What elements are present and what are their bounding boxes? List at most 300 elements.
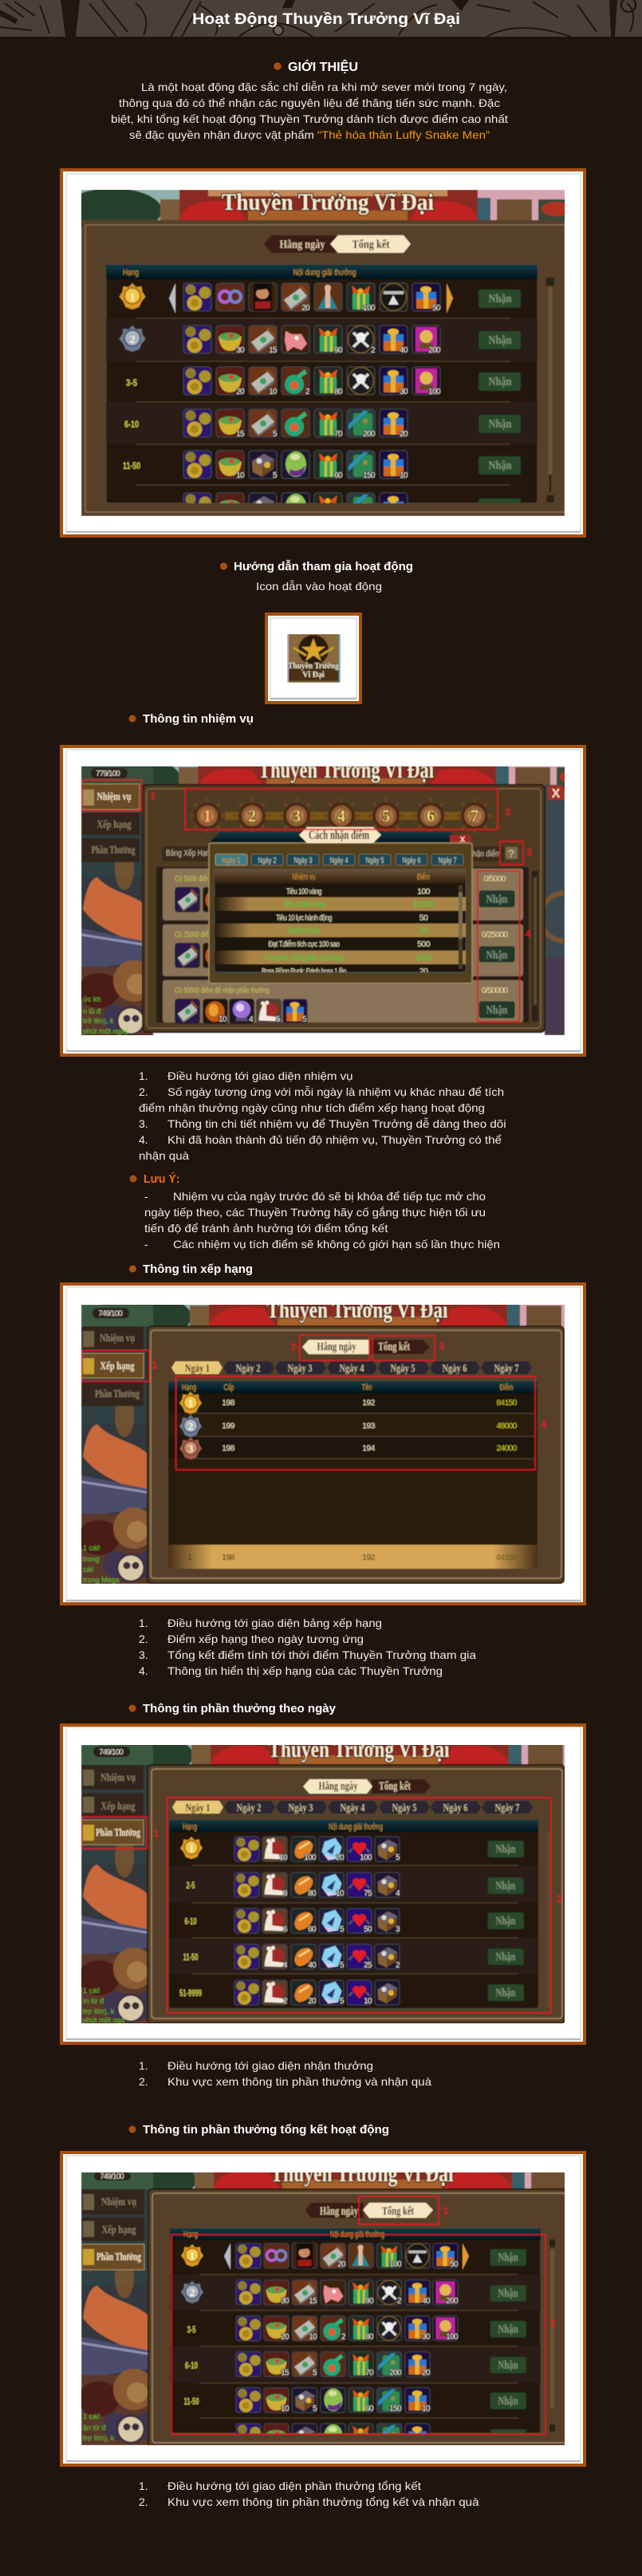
panel: screenshot summary rewards: 15 — [236, 430, 245, 439]
panel: screenshot summary rewards: 90 — [334, 346, 343, 355]
panel: screenshot daily rewards: Ngày 4 — [340, 1802, 365, 1814]
panel: screenshot mission: phút một ngày — [83, 1027, 129, 1035]
panel: screenshot ranking: 192 — [362, 1553, 376, 1562]
list: notes: ngày tiếp theo, các Thuyền Trưởng hãy cố gắng thực hiện tối ưu — [144, 1206, 486, 1219]
list: daily reward notes: Khu vực xem thông tin phần thưởng và nhận quà — [167, 2075, 431, 2088]
panel: screenshot daily rewards: 6-10 — [185, 1916, 197, 1927]
intro paragraph: “Thẻ hóa thân Luffy Snake Men” — [317, 128, 490, 141]
panel: screenshot daily rewards: 75 — [364, 1889, 372, 1898]
panel: screenshot mission: Thuyền Trưởng Vĩ Đại — [258, 757, 434, 783]
panel: screenshot daily rewards: Phần Thưởng — [96, 1827, 140, 1839]
panel: screenshot ranking: 1 — [152, 1360, 158, 1371]
panel: screenshot final rewards: 90 — [365, 2297, 374, 2306]
heading: lưu ý — [129, 1172, 180, 1186]
panel: screenshot mission: Có 50000 điểm để nhận phần thưởng — [175, 986, 270, 995]
panel: screenshot final rewards: 10 — [281, 2405, 289, 2413]
panel: screenshot summary rewards: 2 — [371, 346, 376, 355]
panel: screenshot mission: ức kh — [83, 995, 101, 1003]
list: daily reward notes: 2. — [139, 2075, 148, 2088]
panel: screenshot ranking: Điểm — [499, 1383, 514, 1392]
panel: screenshot mission: Tiêu 10000 vàng — [282, 900, 325, 909]
panel: screenshot final rewards: 10 — [309, 2333, 317, 2342]
panel: screenshot mission: Ngày 5 — [365, 857, 384, 865]
panel: screenshot summary rewards: Nhận — [488, 418, 512, 431]
panel: screenshot mission: 3 — [293, 806, 301, 825]
panel: screenshot daily rewards: 5 — [340, 1961, 345, 1970]
panel: screenshot final rewards: 70 — [365, 2369, 374, 2377]
panel: screenshot summary rewards: 3-5 — [126, 377, 137, 388]
panel: screenshot summary rewards: 200 — [428, 346, 441, 355]
list: mission notes: nhận quà — [139, 1149, 189, 1162]
panel: screenshot ranking: 198 — [222, 1553, 235, 1562]
panel: screenshot mission: ? — [508, 847, 514, 860]
panel: screenshot daily rewards: 6 — [283, 1925, 288, 1934]
intro paragraph: sẽ đặc quyền nhận được vật phẩm — [129, 128, 314, 141]
panel: activity icon: Thuyền Trưởng — [288, 662, 339, 671]
panel: screenshot summary rewards: 10 — [269, 388, 278, 396]
list: ranking notes: Điểm xếp hạng theo ngày tương ứng — [167, 1633, 364, 1645]
panel: screenshot daily rewards: 4 — [283, 1961, 288, 1970]
panel: screenshot summary rewards: 200 — [363, 430, 376, 439]
panel: screenshot daily rewards: 1 — [153, 1828, 159, 1839]
panel: screenshot ranking: 192 — [362, 1398, 376, 1408]
panel: screenshot final rewards: Nhận — [498, 2395, 518, 2408]
panel: screenshot ranking: 194 — [362, 1444, 376, 1453]
panel: screenshot daily rewards: 20 — [308, 1997, 317, 2006]
panel: screenshot mission: Ngày 6 — [402, 857, 421, 865]
panel: screenshot ranking: trong Mega — [83, 1576, 120, 1584]
panel: screenshot summary rewards: 10 — [400, 471, 408, 480]
panel: screenshot mission: 779/100 — [96, 770, 120, 778]
panel: screenshot daily rewards: Xếp hạng — [100, 1801, 136, 1813]
panel: screenshot mission: trở lên), k — [83, 1017, 114, 1025]
panel: screenshot daily rewards: Ngày 1 — [185, 1802, 211, 1814]
panel: screenshot summary rewards: 100 — [428, 388, 441, 396]
panel: screenshot daily rewards: Hằng ngày — [319, 1780, 358, 1793]
panel: screenshot mission: Có 5000 điểm — [175, 874, 211, 884]
list: notes: - — [144, 1190, 148, 1203]
panel: screenshot mission: 2 — [248, 806, 256, 825]
panel: screenshot mission: X — [552, 787, 561, 801]
panel: screenshot mission: 10 — [219, 1015, 227, 1024]
panel: screenshot ranking: 193 — [362, 1421, 376, 1431]
panel: screenshot summary rewards: Hằng ngày — [279, 238, 325, 251]
panel: screenshot final rewards: 749/100 — [100, 2172, 124, 2181]
panel: screenshot ranking: Thuyền Trưởng Vĩ Đại — [266, 1297, 448, 1323]
panel: screenshot summary rewards: 100 — [363, 304, 376, 313]
heading: thông tin xếp hạng: Thông tin xếp hạng — [143, 1263, 253, 1276]
panel: screenshot daily rewards: Nhận — [496, 1951, 516, 1964]
panel: screenshot final rewards: 3-5 — [187, 2324, 196, 2335]
panel: screenshot final rewards: Tổng kết — [382, 2205, 414, 2218]
panel: screenshot final rewards: 10 — [422, 2405, 431, 2413]
panel: screenshot daily rewards: 2-5 — [187, 1880, 195, 1891]
panel: screenshot summary rewards: 20 — [236, 388, 245, 396]
panel: screenshot ranking: 1 cái! — [83, 1544, 100, 1552]
panel: screenshot mission: Điểm — [417, 872, 430, 882]
panel: screenshot final rewards: 40 — [422, 2297, 431, 2306]
panel: screenshot mission: Nhận — [486, 949, 508, 962]
list: notes: Các nhiệm vụ tích điểm sẽ không có giới hạn số lần thực hiện — [173, 1238, 500, 1251]
panel: screenshot mission: 20 — [419, 926, 428, 935]
heading: thông tin phần thưởng tổng kết: Thông tin phần thưởng tổng kết hoạt động — [143, 2124, 389, 2137]
panel: screenshot daily rewards: 5 — [396, 1853, 400, 1862]
panel: screenshot mission: Phần Thưởng — [91, 845, 136, 857]
panel: screenshot summary rewards: 15 — [269, 346, 278, 355]
list: notes — [144, 1190, 500, 1251]
panel: screenshot summary rewards: 11-50 — [123, 460, 140, 471]
list: daily reward notes: Điều hướng tới giao diện nhận thưởng — [167, 2059, 373, 2072]
panel: screenshot daily rewards: 51-9999 — [179, 1987, 202, 1999]
panel: screenshot ranking: Ngày 2 — [236, 1362, 261, 1374]
list: mission notes: điểm nhận thưởng ngày cũng như tích điểm xếp hạng hoạt động — [139, 1101, 485, 1114]
panel: screenshot mission: X — [460, 836, 466, 845]
panel: screenshot summary rewards: Tổng kết — [353, 238, 390, 251]
panel: screenshot final rewards: Thuyền Trưởng Vĩ Đại — [271, 2160, 453, 2187]
panel: screenshot ranking: 2 — [291, 1341, 297, 1353]
panel: screenshot summary rewards: 5 — [273, 430, 278, 439]
panel: screenshot ranking: 199 — [222, 1421, 235, 1431]
panel: screenshot ranking: 84150 — [496, 1553, 518, 1562]
panel: screenshot mission: 100 — [417, 887, 431, 896]
panel: screenshot daily rewards: ìn từ đ — [83, 1997, 104, 2005]
panel: screenshot ranking: Cấp — [223, 1383, 234, 1392]
heading: hướng dẫn tham gia: Hướng dẫn tham gia hoạt động — [234, 560, 413, 573]
list: notes: tiến độ để tránh ảnh hưởng tới điểm tổng kết — [144, 1222, 388, 1235]
intro paragraph — [111, 81, 508, 141]
panel: screenshot summary rewards: 2 — [305, 388, 310, 396]
list: mission notes: Khi đã hoàn thành đủ tiến độ nhiệm vụ, Thuyền Trưởng có thể — [167, 1133, 502, 1146]
heading: lưu ý: Lưu Ý: — [144, 1172, 180, 1186]
panel: screenshot ranking: Ngày 1 — [185, 1362, 210, 1374]
panel: screenshot mission: Ngày 7 — [439, 857, 457, 865]
panel: screenshot ranking: 3 — [188, 1444, 193, 1455]
panel: screenshot daily rewards: 80 — [308, 1889, 317, 1898]
panel: screenshot final rewards: ận từ đ — [83, 2424, 106, 2432]
panel: screenshot ranking: Nhiệm vụ — [100, 1333, 135, 1345]
panel: screenshot final rewards: trợ lớn), k — [83, 2434, 115, 2442]
list: ranking notes: 1. — [139, 1617, 148, 1629]
panel: screenshot mission: 12000 — [413, 900, 435, 909]
panel: screenshot mission: 1 — [203, 806, 211, 825]
panel: screenshot daily rewards: Nội dung giải thưởng — [329, 1822, 383, 1832]
panel: screenshot summary rewards: 6-10 — [124, 419, 139, 430]
heading: giới thiệu: GIỚI THIỆU — [288, 59, 358, 74]
panel: screenshot mission: 1000 — [416, 953, 432, 963]
panel: screenshot daily rewards: 749/100 — [99, 1748, 124, 1757]
panel: screenshot daily rewards: Hạng — [183, 1822, 197, 1832]
panel: screenshot mission: Ngày 2 — [258, 857, 277, 865]
panel: screenshot daily rewards: 2 — [557, 1893, 562, 1904]
panel: screenshot summary rewards — [60, 168, 586, 538]
panel: screenshot summary rewards: Nhận — [488, 334, 512, 347]
list: mission notes: 4. — [139, 1133, 148, 1146]
panel: screenshot summary rewards: 2 — [129, 334, 136, 346]
panel: screenshot daily rewards: 50 — [364, 1925, 372, 1934]
panel: screenshot daily rewards: 60 — [308, 1925, 317, 1934]
panel: screenshot mission: Nhận — [486, 1004, 508, 1017]
panel: screenshot final rewards: 30 — [281, 2297, 289, 2306]
list: final reward notes: 2. — [139, 2495, 148, 2508]
panel: screenshot daily rewards: 2 — [396, 1961, 400, 1970]
panel: screenshot final rewards: 100 — [446, 2333, 459, 2342]
panel: screenshot summary rewards: 30 — [236, 346, 245, 355]
panel: screenshot daily rewards: 1 — [188, 1843, 195, 1855]
panel: screenshot mission: Nhiệm vụ — [292, 872, 316, 882]
panel: screenshot ranking: cái! — [83, 1566, 94, 1574]
panel: screenshot summary rewards: 30 — [400, 388, 408, 396]
panel: screenshot mission: Tiêu 100 vàng — [286, 887, 322, 896]
panel: activity icon: Vĩ Đại — [302, 671, 325, 679]
panel: screenshot final rewards: Nhận — [498, 2287, 518, 2300]
list: final reward notes: 1. — [139, 2479, 148, 2492]
panel: screenshot daily rewards: 5 — [340, 1997, 345, 2006]
panel: screenshot mission: 0/50000 — [482, 986, 508, 995]
panel: screenshot final rewards: 15 — [281, 2369, 289, 2377]
list: daily reward notes: 1. — [139, 2059, 148, 2072]
panel: screenshot ranking: 24000 — [496, 1444, 518, 1453]
panel: screenshot daily rewards: 10 — [364, 1997, 372, 2006]
panel: screenshot mission: 5 — [382, 806, 390, 825]
panel: activity icon — [266, 614, 360, 703]
panel: screenshot mission: Ra khơi 1 lần — [288, 926, 321, 935]
panel: screenshot daily rewards: 5 — [340, 1925, 345, 1934]
panel: screenshot ranking: 2 — [188, 1421, 193, 1433]
panel: screenshot summary rewards: 150 — [363, 471, 376, 480]
panel: screenshot ranking: Phần Thưởng — [95, 1388, 140, 1400]
panel: screenshot daily rewards: Nhận — [496, 1843, 516, 1856]
panel: screenshot final rewards: 1 — [443, 2205, 449, 2216]
panel: screenshot final rewards: Hạng — [183, 2230, 198, 2239]
panel: screenshot mission: Ngày 3 — [293, 857, 313, 865]
panel: screenshot ranking: 198 — [222, 1398, 235, 1408]
panel: screenshot daily rewards: phút một ngà — [83, 2016, 125, 2024]
panel: screenshot daily rewards: 10 — [336, 1889, 345, 1898]
panel: screenshot mission: Nhận — [486, 893, 508, 906]
panel: screenshot mission: 7 — [471, 806, 479, 825]
intro paragraph: Là một hoạt động đặc sắc chỉ diễn ra khi mở sever mới trong 7 ngày, — [141, 81, 507, 93]
list: notes: Nhiệm vụ của ngày trước đó sẽ bị khóa để tiếp tục mở cho — [173, 1190, 486, 1203]
panel: screenshot ranking: 198 — [222, 1444, 235, 1453]
panel: screenshot final rewards: 2 — [341, 2333, 346, 2342]
panel: screenshot summary rewards: Hạng — [123, 268, 139, 278]
panel: screenshot mission: 50 — [419, 913, 428, 923]
panel: screenshot ranking: 1 — [188, 1398, 193, 1410]
list: ranking notes: 4. — [139, 1664, 148, 1677]
panel: screenshot final rewards: 2 — [397, 2297, 402, 2306]
list: final reward notes — [139, 2479, 479, 2508]
panel: screenshot ranking: Hằng ngày — [317, 1341, 356, 1353]
panel: screenshot final rewards: 80 — [365, 2333, 374, 2342]
panel: screenshot mission: 0/5000 — [483, 874, 506, 884]
panel: screenshot ranking: 3 — [439, 1341, 445, 1352]
panel: screenshot mission: 2 — [506, 806, 511, 817]
panel: screenshot final rewards: 20 — [337, 2260, 346, 2269]
panel: screenshot ranking: Ngày 4 — [340, 1362, 364, 1374]
panel: screenshot final rewards: Nội dung giải thưởng — [330, 2230, 384, 2239]
intro paragraph: thông qua đó có thể nhận các nguyên liệu để thăng tiến sức mạnh. Đặc — [119, 97, 500, 109]
panel: screenshot final rewards: 150 — [389, 2405, 402, 2413]
panel: screenshot summary rewards: 60 — [334, 471, 343, 480]
panel: screenshot mission: 3 — [527, 847, 533, 858]
panel: screenshot ranking: Xếp hạng — [100, 1361, 134, 1373]
panel: screenshot summary rewards: Nội dung giải thưởng — [293, 268, 356, 278]
panel: screenshot summary rewards: 20 — [400, 430, 408, 439]
panel: screenshot final rewards: Nhận — [498, 2251, 518, 2264]
panel: screenshot ranking: Tên — [362, 1383, 372, 1392]
list: ranking notes: Thông tin hiển thị xếp hạng của các Thuyền Trưởng — [167, 1664, 443, 1677]
panel: screenshot daily rewards: Nhận — [496, 1987, 516, 1999]
panel: screenshot daily rewards: Nhận — [496, 1915, 516, 1928]
panel: screenshot daily rewards: Ngày 3 — [289, 1802, 313, 1814]
panel: screenshot ranking: Ngày 6 — [442, 1362, 467, 1374]
panel: screenshot ranking: Ngày 5 — [391, 1362, 416, 1374]
list: ranking notes: 2. — [139, 1633, 148, 1645]
panel: screenshot mission: Cách nhận điểm — [309, 829, 369, 842]
panel: screenshot mission: Boss Rồng Punk: Đánh boss 1 lần — [262, 967, 347, 976]
panel: screenshot mission: Nhiệm vụ — [97, 791, 132, 803]
panel: screenshot mission: Ngày 4 — [330, 857, 349, 865]
list: mission notes: Thông tin chi tiết nhiệm vụ để Thuyền Trưởng dễ dàng theo dõi — [167, 1117, 506, 1130]
panel: screenshot final rewards: Xếp hạng — [102, 2224, 136, 2236]
text: icon dẫn vào hoạt động: Icon dẫn vào hoạt động — [256, 580, 382, 593]
list: mission notes: Điều hướng tới giao diện nhiệm vụ — [167, 1069, 353, 1082]
panel: screenshot mission: Có 25000 điểm — [175, 930, 213, 939]
panel: screenshot daily rewards — [60, 1723, 586, 2045]
panel: screenshot summary rewards: 20 — [301, 304, 310, 313]
panel: screenshot summary rewards: 50 — [432, 304, 441, 313]
panel: screenshot ranking: 4 — [542, 1419, 547, 1430]
panel: screenshot daily rewards: 4 — [396, 1889, 400, 1898]
panel: screenshot mission: 20 — [419, 967, 428, 976]
panel: screenshot summary rewards: Nhận — [488, 293, 512, 305]
panel: screenshot daily rewards: 10 — [279, 1853, 288, 1862]
panel: screenshot summary rewards: Nhận — [488, 376, 512, 388]
panel: screenshot summary rewards: 70 — [334, 430, 343, 439]
panel: screenshot daily rewards: 20 — [336, 1853, 345, 1862]
panel: screenshot mission: Tiêu 10 lực hành động — [276, 913, 333, 923]
list: mission notes: 2. — [139, 1085, 148, 1098]
list: daily reward notes — [139, 2059, 431, 2088]
panel: screenshot summary rewards: 1 — [129, 292, 136, 304]
panel: screenshot daily rewards: trợ lớn), k — [83, 2007, 115, 2015]
panel: screenshot final rewards: 5 — [313, 2405, 317, 2413]
panel: screenshot final rewards: 5 — [313, 2369, 317, 2377]
intro paragraph: biệt, khi tổng kết hoạt động Thuyền Trưởng dành tích được điểm cao nhất — [111, 112, 508, 125]
panel: screenshot final rewards: 100 — [389, 2260, 402, 2269]
panel: screenshot mission: 4 — [337, 806, 346, 825]
panel: screenshot final rewards: 60 — [365, 2405, 374, 2413]
panel: screenshot daily rewards: 1 cái! — [83, 1987, 100, 1995]
panel: screenshot final rewards: Nhận — [498, 2359, 518, 2372]
panel: screenshot final rewards: Nhiệm vụ — [101, 2196, 136, 2208]
panel: screenshot summary rewards: 80 — [334, 388, 343, 396]
panel: screenshot mission: nhận điểm — [469, 849, 501, 859]
panel: screenshot mission: 500 — [417, 939, 431, 949]
panel: screenshot summary rewards: 5 — [273, 471, 278, 480]
panel: screenshot mission: Công hội : Cống hiến 120 vàng — [265, 953, 344, 963]
panel: screenshot ranking: trong — [83, 1555, 100, 1563]
panel: screenshot ranking: 1 — [187, 1553, 192, 1562]
panel: screenshot ranking: 749/100 — [98, 1310, 123, 1318]
panel: screenshot mission: Đạt T.điểm tích cực 100 sao — [268, 939, 340, 949]
panel: screenshot daily rewards: Nhiệm vụ — [100, 1772, 136, 1784]
panel: screenshot mission: 5 — [302, 1015, 307, 1024]
list: ranking notes: Điều hướng tới giao diện bảng xếp hạng — [167, 1617, 382, 1629]
panel: screenshot daily rewards: 100 — [304, 1853, 317, 1862]
panel: screenshot summary rewards: Nhận — [488, 459, 512, 472]
list: notes: - — [144, 1238, 148, 1251]
panel: screenshot daily rewards: Thuyền Trưởng Vĩ Đại — [268, 1736, 450, 1763]
list: ranking notes: Tổng kết điểm tính tới thời điểm Thuyền Trưởng tham gia — [167, 1648, 476, 1661]
panel: screenshot final rewards: Hằng ngày — [320, 2205, 358, 2218]
panel: screenshot mission: 4 — [526, 928, 531, 939]
list: final reward notes: Điều hướng tới giao diện phần thưởng tổng kết — [167, 2479, 421, 2492]
panel: screenshot daily rewards: Ngày 5 — [392, 1802, 417, 1814]
panel: screenshot final rewards: 2 — [550, 2318, 556, 2329]
panel: screenshot final rewards: 11-50 — [183, 2396, 199, 2407]
panel: screenshot mission: 5 — [276, 1015, 281, 1024]
panel: screenshot ranking — [60, 1282, 586, 1605]
panel: screenshot mission: n lũ đ — [83, 1007, 100, 1015]
panel: screenshot daily rewards: Ngày 6 — [443, 1802, 468, 1814]
panel: screenshot final rewards: 1 cái! — [83, 2413, 100, 2420]
panel: screenshot daily rewards: 25 — [364, 1961, 372, 1970]
list: ranking notes — [139, 1617, 476, 1677]
panel: screenshot daily rewards: Ngày 2 — [236, 1802, 262, 1814]
panel: screenshot daily rewards: 100 — [360, 1853, 372, 1862]
panel: screenshot final rewards: Nhận — [498, 2323, 518, 2336]
panel: screenshot mission: 6 — [427, 806, 435, 825]
panel: screenshot daily rewards: 40 — [308, 1961, 317, 1970]
panel: screenshot mission: Bảng Xếp Hạng — [166, 849, 214, 858]
panel: screenshot final rewards: 6-10 — [185, 2360, 198, 2371]
panel: screenshot ranking: Tổng kết — [378, 1341, 410, 1353]
panel: screenshot ranking: 48000 — [496, 1421, 518, 1431]
panel: screenshot final rewards: Phần Thưởng — [96, 2251, 141, 2263]
panel: screenshot mission — [60, 745, 586, 1057]
title: Hoạt Động Thuyền Trưởng Vĩ Đại — [192, 11, 460, 28]
panel: screenshot final rewards: 200 — [446, 2297, 459, 2306]
list: final reward notes: Khu vực xem thông tin phần thưởng tổng kết và nhận quà — [167, 2495, 479, 2508]
heading: thông tin nhiệm vụ: Thông tin nhiệm vụ — [143, 713, 254, 726]
panel: screenshot ranking: Ngày 3 — [287, 1362, 313, 1374]
panel: screenshot summary rewards: Thuyền Trưởng Vĩ Đại — [222, 189, 434, 215]
list: ranking notes: 3. — [139, 1648, 148, 1661]
panel: screenshot daily rewards: 8 — [283, 1889, 288, 1898]
panel: screenshot final rewards: 30 — [422, 2333, 431, 2342]
panel: screenshot ranking: Ngày 7 — [494, 1362, 519, 1374]
panel: screenshot mission: Ngày 1 — [222, 857, 241, 865]
panel: screenshot daily rewards: Tổng kết — [379, 1780, 411, 1793]
panel: screenshot ranking: 84150 — [496, 1398, 518, 1408]
panel: screenshot ranking: Hạng — [182, 1383, 196, 1392]
panel: screenshot final rewards: 20 — [422, 2369, 431, 2377]
list: mission notes: 1. — [139, 1069, 148, 1082]
panel: screenshot daily rewards: Ngày 7 — [494, 1802, 520, 1814]
panel: screenshot daily rewards: Nhận — [496, 1880, 516, 1893]
panel: screenshot mission: 1 — [151, 790, 156, 802]
panel: screenshot final rewards: 200 — [389, 2369, 402, 2377]
panel: screenshot mission: Xếp hạng — [97, 819, 131, 831]
panel: screenshot daily rewards: 2 — [283, 1997, 288, 2006]
list: mission notes: Số ngày tương ứng với mỗi ngày là nhiệm vụ khác nhau để tích — [167, 1085, 504, 1098]
panel: screenshot final rewards: 2 — [190, 2287, 195, 2299]
list: mission notes: 3. — [139, 1117, 148, 1130]
panel: screenshot daily rewards: 3 — [396, 1925, 400, 1934]
panel: screenshot summary rewards: 40 — [400, 346, 408, 355]
list: mission notes — [139, 1069, 506, 1162]
